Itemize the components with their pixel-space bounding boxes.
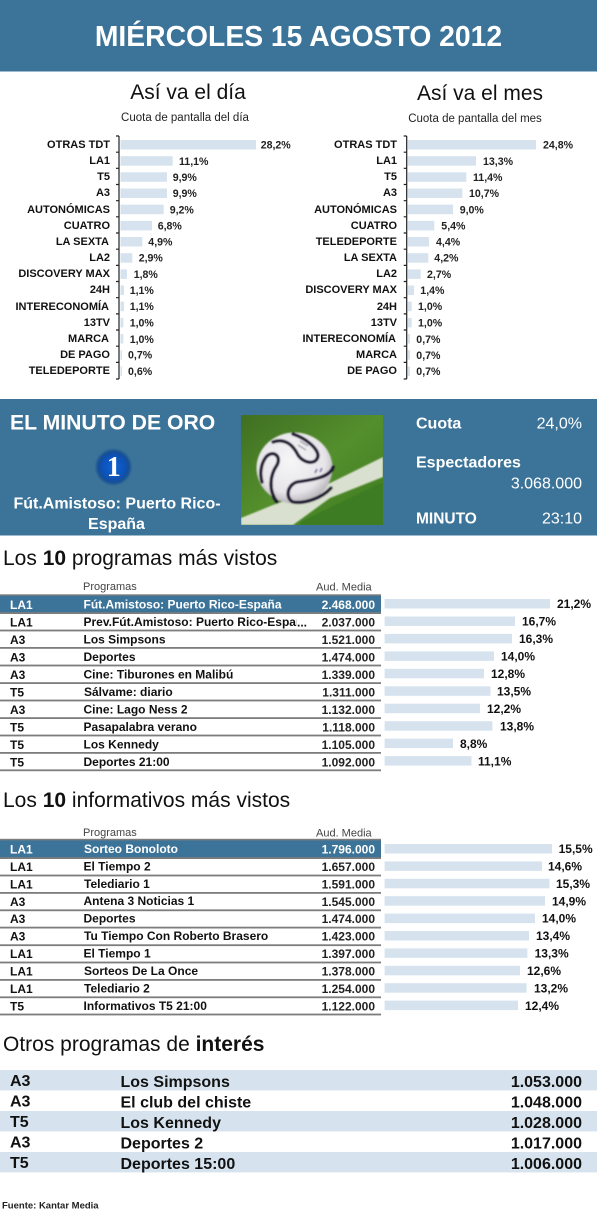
row text: 1.254.000 — [322, 982, 375, 996]
row text: 1.311.000 — [322, 686, 375, 700]
row text: T5 — [10, 1000, 24, 1014]
source note: Fuente: Kantar Media — [2, 1200, 99, 1212]
row text: Cine: Tiburones en Malibú — [84, 668, 233, 682]
labels: day: INTERECONOMÍA — [16, 300, 109, 313]
row text: 1.122.000 — [322, 1000, 375, 1014]
row text: LA1 — [10, 842, 33, 856]
labels: month: DE PAGO — [347, 365, 397, 377]
labels: day: LA SEXTA — [56, 236, 109, 248]
row text: Deportes 21:00 — [84, 755, 170, 769]
row: Los Simpsons: 1.053.000 — [511, 1074, 582, 1091]
row text: T5 — [10, 756, 24, 770]
stat: minuto: 23:10 — [542, 510, 582, 528]
bar chart: top 10 informativos share: 14,9% — [552, 894, 586, 908]
bar chart: top 10 informativos share: 15,3% — [556, 877, 590, 891]
stat: cuota: 24,0% — [537, 416, 582, 432]
labels: month: OTRAS TDT — [334, 139, 397, 151]
labels: month: 24H — [377, 301, 397, 313]
values: day — [128, 140, 291, 378]
row: Deportes 2: A3 — [10, 1134, 31, 1152]
row stripes — [0, 1070, 597, 1172]
row: El club del chiste: A3 — [10, 1094, 31, 1110]
row: Deportes 15:00: Deportes 15:00 — [120, 1156, 235, 1173]
bar chart: top 10 informativos share: 13,2% — [534, 982, 568, 996]
row text: 1.474.000 — [322, 650, 375, 664]
row text: 1.339.000 — [322, 668, 375, 682]
stat: cuota: Cuota — [416, 416, 461, 432]
values: day: 6,8% — [158, 220, 182, 232]
subtitle: month: Cuota de pantalla del mes — [408, 113, 542, 125]
values: day: 0,7% — [128, 350, 153, 362]
row text: Deportes — [84, 912, 136, 926]
values: month: 0,7% — [416, 366, 441, 378]
row separators — [0, 594, 381, 771]
row text: A3 — [10, 650, 26, 664]
row text: Los Kennedy — [84, 738, 159, 752]
row text: T5 — [10, 720, 24, 734]
stat: cuota — [416, 416, 582, 432]
row text: 2.037.000 — [322, 616, 375, 630]
icon: La 1 channel logo — [94, 448, 132, 486]
row text: 1.378.000 — [322, 964, 375, 978]
values: day: 9,9% — [173, 188, 197, 200]
heading: month: Así va el mes — [417, 82, 543, 105]
bar chart: top 10 programas share: 13,8% — [500, 720, 534, 734]
row text: T5 — [10, 686, 24, 700]
values: day: 9,9% — [173, 172, 197, 184]
bar chart: top 10 programas share: 8,8% — [460, 737, 488, 751]
program name: Fút.Amistoso: Puerto Rico- — [13, 496, 221, 512]
values: month: 4,4% — [436, 236, 461, 248]
bar chart: top 10 programas share: 11,1% — [478, 754, 512, 768]
labels: month: AUTONÓMICAS — [314, 203, 397, 216]
row text: 1.132.000 — [322, 703, 375, 717]
values: month: 2,7% — [427, 269, 452, 281]
row text: LA1 — [10, 860, 33, 874]
row text: Deportes — [84, 650, 136, 664]
labels: day: LA2 — [89, 252, 110, 264]
row text: T5 — [10, 738, 24, 752]
highlighted row — [0, 840, 381, 858]
bar chart: top 10 programas share: 16,3% — [519, 632, 553, 646]
values: month: 5,4% — [441, 220, 466, 232]
values: month: 11,4% — [473, 172, 503, 184]
row text: ... — [297, 616, 307, 630]
labels: month: INTERECONOMÍA — [302, 332, 396, 345]
subtitle: day: Cuota de pantalla del día — [121, 112, 250, 124]
row text — [10, 598, 375, 770]
labels: day: A3 — [96, 187, 110, 199]
table: top 10 programas — [0, 581, 381, 771]
values: month — [416, 140, 574, 378]
values: day: 1,0% — [130, 334, 154, 346]
row text: Antena 3 Noticias 1 — [84, 894, 195, 908]
row: Los Simpsons: A3 — [10, 1073, 31, 1090]
bar chart: top 10 informativos share — [385, 842, 593, 1013]
row text: A3 — [10, 703, 26, 717]
column headers: Aud. Media — [316, 828, 373, 840]
values: month: 9,0% — [460, 204, 484, 216]
row text: Los Simpsons — [84, 632, 166, 646]
program name: España — [88, 516, 145, 533]
bar chart: top 10 programas share: 13,5% — [497, 684, 531, 698]
labels: month: LA1 — [376, 155, 397, 167]
labels: day: 13TV — [84, 317, 111, 329]
bar chart: top 10 programas share: 14,0% — [501, 650, 535, 664]
row text: El Tiempo 1 — [84, 946, 151, 960]
row text: 1.474.000 — [322, 912, 375, 926]
row: Los Kennedy — [10, 1114, 582, 1132]
row text: A3 — [10, 912, 26, 926]
row text: 1.105.000 — [322, 738, 375, 752]
values: day: 9,2% — [170, 204, 194, 216]
values: month: 0,7% — [416, 350, 441, 362]
stat: minuto — [416, 510, 582, 528]
values: day: 1,8% — [134, 269, 158, 281]
values: month: 4,2% — [434, 252, 459, 264]
column headers — [83, 827, 373, 840]
row: Los Kennedy: Los Kennedy — [120, 1115, 221, 1132]
table: top 10 informativos — [0, 827, 381, 1015]
labels: month: 13TV — [371, 317, 398, 329]
stat: espectadores: Espectadores — [416, 454, 521, 472]
row text: Telediario 1 — [84, 877, 150, 891]
header banner — [0, 0, 597, 72]
heading: top 10 programas: Los 10 programas más vistos — [3, 547, 277, 570]
row text: A3 — [10, 930, 26, 944]
bars: day — [120, 140, 256, 376]
program name — [13, 496, 221, 533]
row text: Pasapalabra verano — [84, 720, 197, 734]
row: Los Simpsons — [10, 1073, 582, 1091]
labels: month: LA2 — [376, 268, 397, 280]
values: day: 2,9% — [139, 252, 163, 264]
row text: A3 — [10, 895, 26, 909]
row: El club del chiste: 1.048.000 — [511, 1094, 582, 1112]
values: day: 1,0% — [130, 318, 154, 330]
labels: day: MARCA — [68, 333, 109, 345]
row text: LA1 — [10, 878, 33, 892]
row: Los Kennedy: 1.028.000 — [511, 1115, 582, 1132]
row text: Informativos T5 21:00 — [84, 999, 207, 1013]
bar chart: top 10 programas share: 12,8% — [491, 667, 525, 681]
axis: day — [116, 136, 119, 379]
row text: A3 — [10, 633, 26, 647]
row: Los Simpsons: Los Simpsons — [120, 1074, 230, 1091]
row text: Cine: Lago Ness 2 — [84, 702, 188, 716]
row: Deportes 15:00: 1.006.000 — [511, 1156, 582, 1173]
values: month: 1,4% — [420, 285, 445, 297]
row text: 1.657.000 — [322, 860, 375, 874]
row: Deportes 15:00: T5 — [10, 1155, 29, 1172]
row text: 1.796.000 — [322, 842, 375, 856]
row text: 1.092.000 — [322, 756, 375, 770]
labels: month — [302, 139, 398, 377]
row text: LA1 — [10, 964, 33, 978]
panel: day share chart — [16, 81, 291, 379]
values: day: 4,9% — [148, 236, 173, 248]
labels: month: DISCOVERY MAX — [305, 284, 398, 296]
row: El club del chiste — [10, 1094, 582, 1112]
values: month: 1,0% — [418, 318, 443, 330]
labels: month: T5 — [384, 171, 397, 183]
row text: 1.545.000 — [322, 895, 375, 909]
row: Deportes 2: 1.017.000 — [511, 1136, 582, 1152]
row: Deportes 2 — [10, 1134, 582, 1152]
heading: el minuto de oro: EL MINUTO DE ORO — [10, 412, 215, 434]
row: Deportes 2: Deportes 2 — [120, 1136, 203, 1152]
row text: Tu Tiempo Con Roberto Brasero — [84, 929, 268, 943]
row separators — [0, 839, 381, 1015]
table: otros programas — [0, 1070, 597, 1173]
row text: A3 — [10, 668, 26, 682]
labels: day: 24H — [90, 284, 110, 296]
labels: day: LA1 — [89, 155, 110, 167]
values: day: 1,1% — [130, 301, 154, 313]
stat: espectadores — [416, 454, 582, 492]
row text: LA1 — [10, 947, 33, 961]
column headers: Programas — [83, 827, 137, 839]
row text: Prev.Fút.Amistoso: Puerto Rico-España — [84, 615, 310, 629]
labels: day — [16, 139, 111, 377]
labels: day: AUTONÓMICAS — [27, 203, 110, 216]
bar chart: top 10 informativos share: 12,4% — [525, 999, 559, 1013]
row text: Fút.Amistoso: Puerto Rico-España — [84, 598, 282, 612]
row text: Sorteo Bonoloto — [84, 842, 178, 856]
labels: month: A3 — [383, 187, 397, 199]
labels: day: T5 — [97, 171, 110, 183]
row text: 1.397.000 — [322, 947, 375, 961]
row text: 1.591.000 — [322, 878, 375, 892]
row text: Sálvame: diario — [84, 685, 173, 699]
labels: month: TELEDEPORTE — [316, 236, 397, 248]
row text: Sorteos De La Once — [84, 964, 198, 978]
column headers — [83, 581, 373, 594]
bar chart: top 10 informativos share: 15,5% — [559, 842, 593, 856]
values: day: 28,2% — [261, 140, 291, 152]
bar chart: top 10 programas share — [385, 597, 591, 768]
icon: La 1 channel logo: 1 — [107, 452, 121, 483]
values: month: 0,7% — [416, 334, 441, 346]
bar chart: top 10 informativos share: 13,4% — [536, 929, 570, 943]
heading: top 10 informativos: Los 10 informativos más vistos — [3, 789, 290, 812]
heading: day: Así va el día — [130, 81, 246, 104]
row text: El Tiempo 2 — [84, 860, 151, 874]
panel: month share chart — [302, 82, 574, 379]
labels: day: CUATRO — [64, 220, 110, 232]
values: month: 10,7% — [469, 188, 500, 200]
values: day: 11,1% — [179, 156, 209, 168]
row: Deportes 15:00 — [10, 1155, 582, 1173]
row: El club del chiste: El club del chiste — [120, 1094, 251, 1112]
row text: Telediario 2 — [84, 982, 150, 996]
stat: espectadores: 3.068.000 — [511, 476, 582, 492]
bar chart: top 10 informativos share: 14,6% — [548, 860, 582, 874]
row: Los Kennedy: T5 — [10, 1114, 29, 1131]
bar chart: top 10 programas share: 21,2% — [557, 597, 591, 611]
values: month: 13,3% — [483, 156, 514, 168]
row text: 1.118.000 — [322, 720, 375, 734]
row text — [10, 842, 375, 1014]
labels: day: OTRAS TDT — [47, 139, 110, 151]
labels: day: DE PAGO — [60, 349, 110, 361]
labels: day: TELEDEPORTE — [29, 365, 110, 377]
stat: minuto: MINUTO — [416, 510, 477, 528]
row text: 2.468.000 — [322, 598, 375, 612]
bar chart: top 10 programas share: 16,7% — [522, 614, 556, 628]
highlighted row — [0, 596, 381, 613]
bar chart: top 10 informativos share: 12,6% — [527, 964, 561, 978]
photo: football on grass — [241, 415, 383, 525]
labels: month: MARCA — [356, 349, 397, 361]
bar chart: top 10 informativos share: 13,3% — [535, 946, 569, 960]
row text: LA1 — [10, 982, 33, 996]
labels: month: CUATRO — [351, 220, 397, 232]
values: day: 0,6% — [128, 366, 153, 378]
row text: LA1 — [10, 598, 33, 612]
values: day: 1,1% — [130, 285, 154, 297]
row text: 1.423.000 — [322, 930, 375, 944]
labels: day: DISCOVERY MAX — [18, 268, 111, 280]
bars: month — [408, 140, 536, 376]
column headers: Aud. Media — [316, 582, 373, 594]
bar chart: top 10 informativos share: 14,0% — [542, 912, 576, 926]
panel: el minuto de oro — [0, 399, 597, 536]
row text: 1.521.000 — [322, 633, 375, 647]
row text: LA1 — [10, 616, 33, 630]
values: month: 24,8% — [543, 140, 574, 152]
bar chart: top 10 programas share: 12,2% — [487, 702, 521, 716]
labels: month: LA SEXTA — [344, 252, 397, 264]
axis: month — [404, 136, 407, 379]
column headers: Programas — [83, 581, 137, 593]
values: month: 1,0% — [418, 301, 443, 313]
stats — [416, 416, 582, 528]
heading: otros programas: Otros programas de interés — [3, 1033, 264, 1056]
title: MIÉRCOLES 15 AGOSTO 2012 — [95, 20, 502, 52]
